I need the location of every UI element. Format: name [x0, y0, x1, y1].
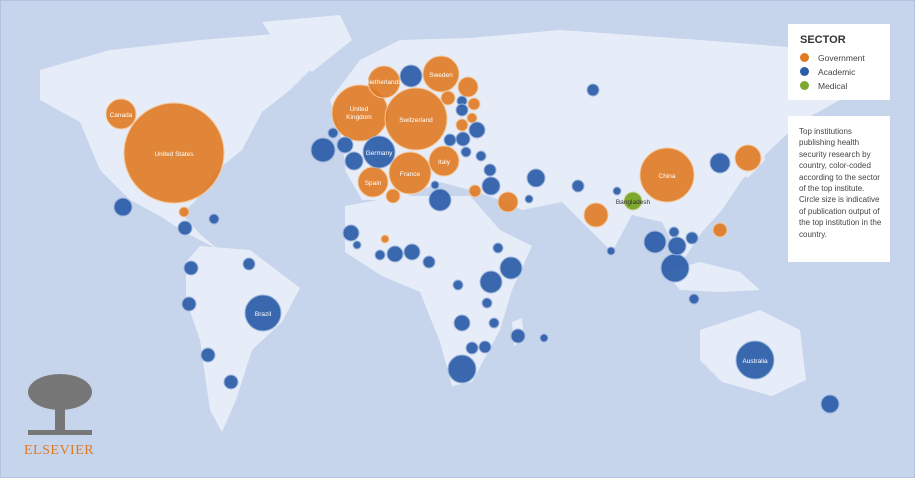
country labels: Bangladesh: [616, 199, 651, 206]
country labels: Brazil: [255, 311, 272, 318]
country labels: France: [400, 171, 420, 178]
country labels: United: [350, 106, 369, 113]
circles: academic: [114, 65, 839, 413]
circles: government: [106, 56, 761, 243]
country labels: Switzerland: [399, 117, 433, 124]
country labels: [110, 72, 768, 365]
country labels: Germany: [366, 150, 393, 157]
legend: sector: Academic: [818, 67, 855, 77]
legend: sector: [788, 24, 890, 100]
country labels: Canada: [110, 112, 133, 119]
legend: sector: Government: [818, 53, 865, 63]
country labels: Netherlands: [366, 79, 402, 86]
circle: medical: [624, 192, 642, 210]
country labels: Italy: [438, 159, 451, 166]
legend: sector: SECTOR: [800, 34, 846, 46]
logo: elsevier: ELSEVIER: [24, 443, 94, 458]
country labels: China: [659, 173, 676, 180]
description text: [788, 116, 890, 262]
logo: elsevier: [24, 374, 94, 458]
country labels: Kingdom: [346, 114, 372, 121]
country labels: Spain: [365, 180, 382, 187]
country labels: United States: [154, 151, 194, 158]
country labels: Australia: [742, 358, 768, 365]
legend: sector: Medical: [818, 81, 847, 91]
country labels: Sweden: [429, 72, 453, 79]
description text: Top institutions publishing health security research by country, color-coded according to the sector of the top institute. Circle size is indicative of publication output of the top institution in the country.: [799, 127, 881, 239]
